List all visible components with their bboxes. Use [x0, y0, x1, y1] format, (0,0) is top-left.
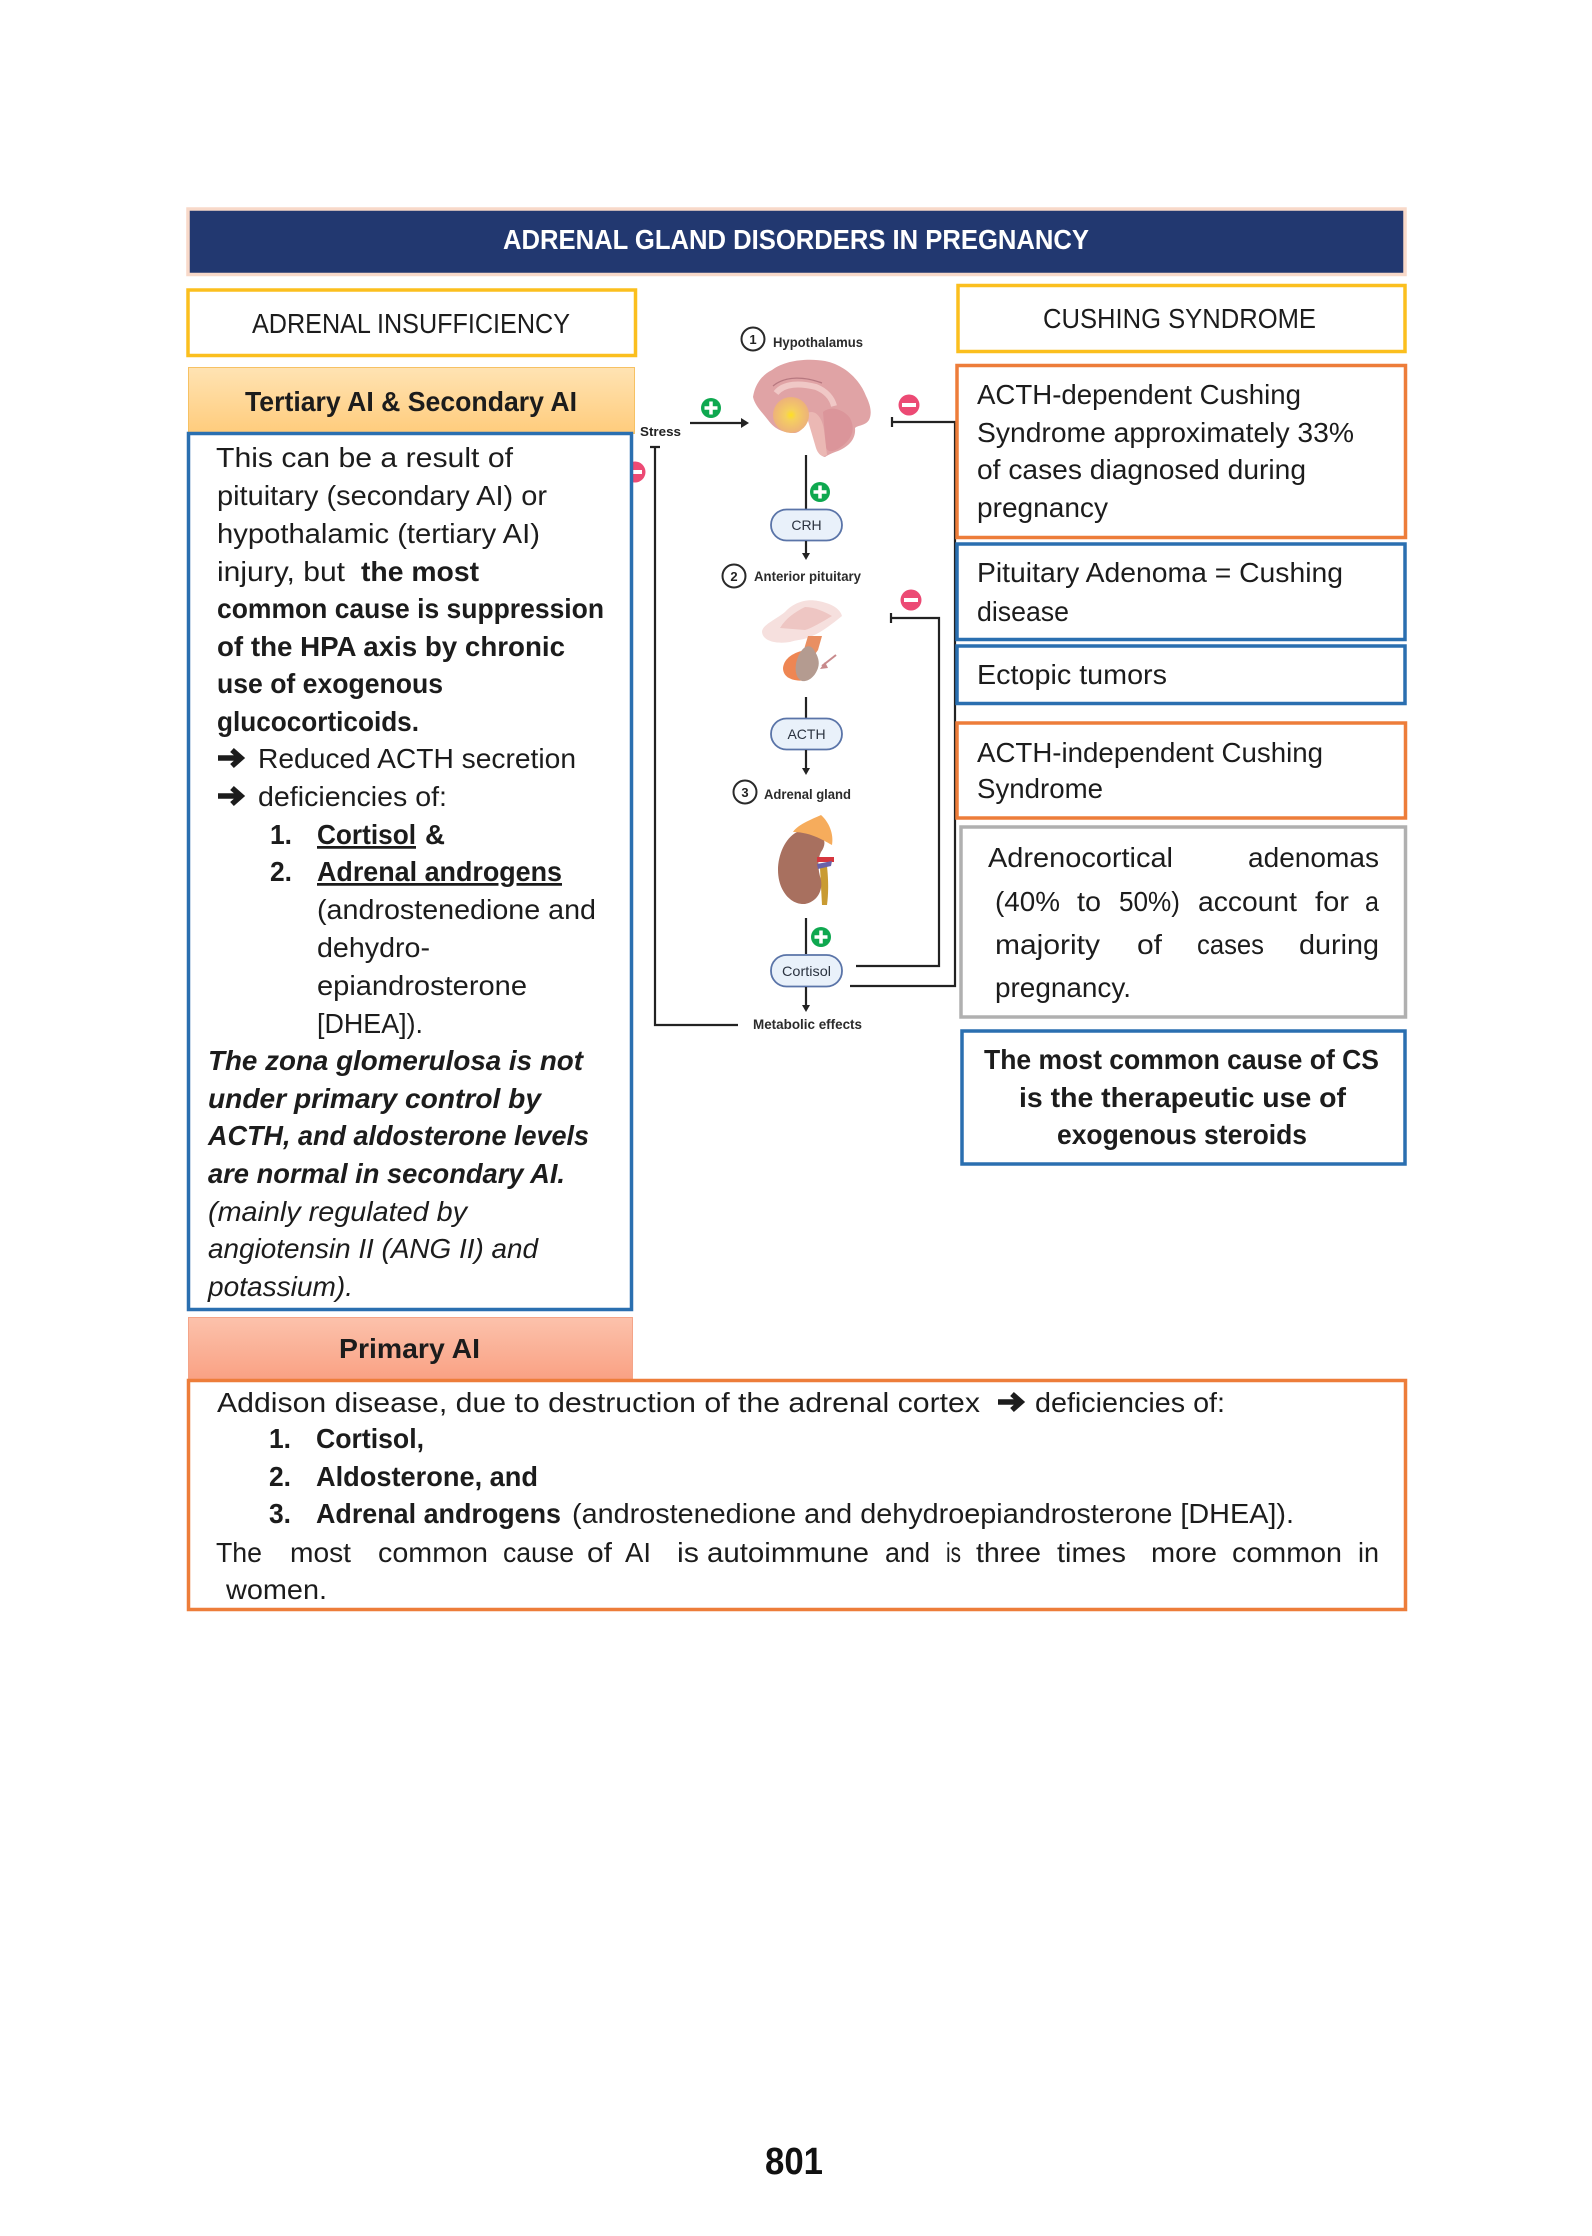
label: adrenal gland: 3	[741, 785, 749, 800]
panel: adrenocortical adenomas: 50%)	[1119, 886, 1180, 917]
text block: zona glomerulosa: are normal in secondary AI.	[208, 1158, 565, 1189]
panel: ACTH-dependent Cushing syndrome: ACTH-dependent Cushing	[977, 379, 1301, 410]
text block: causes: hypothalamic (tertiary AI)	[217, 518, 540, 549]
list: deficiencies: 2.	[270, 856, 292, 887]
text: Addison disease: Addison disease, due to destruction of the adrenal cortex	[217, 1387, 980, 1418]
list: deficiencies: Cortisol	[317, 819, 416, 850]
arrow: pituitary to ACTH	[805, 697, 807, 718]
heading: adrenal insufficiency	[188, 290, 636, 356]
panel: adrenocortical adenomas: Adrenocortical	[988, 842, 1173, 873]
heading: tertiary and secondary AI	[188, 368, 634, 434]
pill: cortisol	[771, 955, 842, 986]
arrow: stress to hypothalamus	[640, 418, 749, 439]
list: deficiencies: 2.	[269, 1461, 291, 1492]
arrow: CRH to pituitary	[802, 541, 810, 560]
callout: most common cause of CS: The most common cause of CS	[984, 1044, 1379, 1075]
label: hypothalamus: 1	[749, 332, 757, 347]
panel: ectopic tumors: Ectopic tumors	[977, 659, 1167, 690]
icon: CRH plus	[810, 482, 830, 502]
text block: causes: glucocorticoids.	[217, 706, 419, 737]
icon: arrow deficiencies	[218, 788, 241, 804]
panel: adrenocortical adenomas: (40%	[995, 886, 1060, 917]
list: deficiencies: dehydro-	[317, 932, 430, 963]
arrow: ACTH to adrenal	[802, 750, 810, 775]
heading: primary AI	[188, 1318, 632, 1380]
text: most common cause of AI	[216, 1537, 1379, 1605]
panel: pituitary adenoma: disease	[977, 596, 1069, 627]
text block: causes: use of exogenous	[217, 668, 443, 699]
title banner: ADRENAL GLAND DISORDERS IN PREGNANCY	[503, 224, 1089, 255]
panel: adrenocortical adenomas: a	[1365, 886, 1380, 917]
text: most common cause of AI: AI	[625, 1537, 651, 1568]
text: most common cause of AI: most	[290, 1537, 351, 1568]
text block: causes: This can be a result of	[216, 442, 513, 473]
text block: zona glomerulosa	[207, 1045, 589, 1302]
icon: pituitary minus	[900, 590, 922, 610]
text block: zona glomerulosa: ACTH, and aldosterone levels	[207, 1120, 589, 1151]
list: deficiencies: epiandrosterone	[317, 970, 527, 1001]
text: most common cause of AI: women.	[225, 1574, 327, 1605]
icon: top inhibition minus	[898, 394, 920, 416]
text: deficiencies of: deficiencies of:	[258, 781, 447, 812]
text: most common cause of AI: autoimmune	[707, 1537, 869, 1568]
panel: adrenocortical adenomas: majority	[995, 929, 1100, 960]
arrow: long cortisol feedback	[850, 417, 955, 986]
pill: cortisol: Cortisol	[782, 963, 831, 979]
text: most common cause of AI: common	[378, 1537, 488, 1568]
list: deficiencies: Aldosterone, and	[316, 1461, 538, 1492]
text block: causes	[216, 442, 604, 737]
arrow: hypothalamus to CRH	[805, 455, 807, 509]
text: most common cause of AI: cause	[503, 1537, 574, 1568]
panel: adrenocortical adenomas: account	[1198, 886, 1297, 917]
label: anterior pituitary: 2	[730, 569, 738, 584]
panel: adrenocortical adenomas: adenomas	[1248, 842, 1379, 873]
text: most common cause of AI: is	[677, 1537, 699, 1568]
text: most common cause of AI: and	[885, 1537, 930, 1568]
callout: most common cause of CS: is the therapeutic use of	[1019, 1082, 1347, 1113]
text block: causes: injury, but	[217, 556, 345, 587]
text: most common cause of AI: in	[1358, 1537, 1379, 1568]
arrow: pituitary cortisol feedback	[856, 613, 939, 966]
panel: pituitary adenoma	[957, 544, 1405, 640]
list: deficiencies: Adrenal androgens	[317, 856, 562, 887]
icon: arrow reduced ACTH	[218, 750, 241, 766]
page number: 801	[765, 2141, 823, 2183]
pill: ACTH	[771, 718, 842, 750]
callout: most common cause of CS	[962, 1031, 1405, 1164]
text: deficiencies of: deficiencies of:	[1035, 1387, 1225, 1418]
list: deficiencies: [DHEA]).	[317, 1008, 423, 1039]
label: anterior pituitary	[722, 564, 861, 588]
list: deficiencies: (androstenedione and dehydroepiandrosterone [DHEA]).	[572, 1498, 1294, 1529]
text: most common cause of AI: times	[1057, 1537, 1126, 1568]
pill: CRH: CRH	[791, 517, 822, 533]
text block: zona glomerulosa: under primary control by	[208, 1083, 543, 1114]
panel: adrenocortical adenomas: during	[1299, 929, 1379, 960]
icon: left inhibition minus	[624, 462, 646, 482]
text: most common cause of AI: is	[946, 1537, 961, 1568]
label: metabolic effects: Metabolic effects	[753, 1017, 862, 1032]
panel: ACTH-dependent Cushing syndrome: pregnancy	[977, 492, 1108, 523]
panel: adrenocortical adenomas: cases	[1197, 929, 1264, 960]
panel: adrenocortical adenomas: of	[1137, 929, 1162, 960]
icon: arrow deficiencies	[998, 1394, 1021, 1410]
panel: adrenocortical adenomas: pregnancy.	[995, 972, 1131, 1003]
text block: causes: the most	[361, 556, 479, 587]
panel: ACTH-dependent Cushing syndrome: Syndrome approximately 33%	[977, 417, 1354, 448]
list: deficiencies: Adrenal androgens	[316, 1498, 561, 1529]
text: most common cause of AI: common	[1232, 1537, 1342, 1568]
list: deficiencies: 1.	[269, 1423, 291, 1454]
icon: pituitary gland	[762, 600, 842, 681]
callout: most common cause of CS: exogenous steroids	[1057, 1119, 1307, 1150]
text block: causes: common cause is suppression	[217, 593, 604, 624]
text block: zona glomerulosa: (mainly regulated by	[208, 1196, 469, 1227]
text block: zona glomerulosa: angiotensin II (ANG II) and	[208, 1233, 540, 1264]
text: most common cause of AI: The	[216, 1537, 262, 1568]
panel: ectopic tumors	[957, 646, 1405, 704]
icon: brain	[753, 360, 871, 457]
panel: ACTH-independent Cushing syndrome: Syndrome	[977, 773, 1103, 804]
flow diagram: HPA axis	[640, 328, 955, 1032]
label: hypothalamus: Hypothalamus	[773, 335, 863, 350]
text block: zona glomerulosa: The zona glomerulosa is not	[208, 1045, 585, 1076]
heading: cushing syndrome	[958, 286, 1405, 352]
arrow: stress to hypothalamus: Stress	[640, 425, 681, 439]
panel: pituitary adenoma: Pituitary Adenoma = Cushing	[977, 557, 1343, 588]
heading: primary AI: Primary AI	[339, 1333, 480, 1364]
list: deficiencies: Cortisol,	[316, 1423, 424, 1454]
panel: ACTH-dependent Cushing syndrome: of cases diagnosed during	[977, 454, 1306, 485]
panel: adrenocortical adenomas	[961, 827, 1406, 1017]
text: most common cause of AI: more	[1151, 1537, 1217, 1568]
text block: causes: of the HPA axis by chronic	[217, 631, 565, 662]
arrow: adrenal to cortisol	[805, 918, 807, 954]
icon: cortisol plus	[811, 927, 831, 947]
list: deficiencies: (androstenedione and	[317, 894, 596, 925]
list: deficiencies: 3.	[269, 1498, 291, 1529]
heading: adrenal insufficiency: ADRENAL INSUFFICIENCY	[252, 308, 570, 339]
label: anterior pituitary: Anterior pituitary	[754, 569, 861, 584]
list: deficiencies	[269, 1423, 1294, 1529]
text: reduced ACTH secretion: Reduced ACTH secretion	[258, 743, 576, 774]
label: adrenal gland: Adrenal gland	[764, 787, 851, 802]
list: deficiencies: &	[425, 819, 445, 850]
label: hypothalamus	[742, 328, 863, 350]
label: adrenal gland	[734, 780, 851, 804]
arrow: metabolic effects feedback to stress	[650, 447, 738, 1025]
pill: ACTH: ACTH	[787, 726, 826, 742]
text: most common cause of AI: of	[587, 1537, 612, 1568]
panel: ACTH-dependent Cushing syndrome	[957, 366, 1406, 538]
panel: ACTH-independent Cushing syndrome: ACTH-independent Cushing	[977, 737, 1323, 768]
heading: tertiary and secondary AI: Tertiary AI & Secondary AI	[245, 386, 577, 417]
panel: primary AI text	[188, 1380, 1406, 1610]
panel: adrenocortical adenomas: to	[1077, 886, 1101, 917]
panel: tertiary and secondary AI text	[188, 434, 632, 1310]
list: deficiencies	[270, 819, 596, 1039]
text: most common cause of AI: three	[976, 1537, 1041, 1568]
panel: adrenocortical adenomas: for	[1315, 886, 1349, 917]
text block: zona glomerulosa: potassium).	[207, 1271, 353, 1302]
text block: causes: pituitary (secondary AI) or	[217, 480, 547, 511]
title banner	[188, 209, 1405, 274]
list: deficiencies: 1.	[270, 819, 292, 850]
heading: cushing syndrome: CUSHING SYNDROME	[1043, 303, 1316, 334]
pill: CRH	[771, 510, 842, 540]
icon: kidney and adrenal gland	[778, 815, 834, 905]
panel: ACTH-independent Cushing syndrome	[957, 723, 1406, 818]
arrow: cortisol to metabolic effects	[802, 987, 810, 1012]
icon: stress plus	[701, 398, 721, 418]
